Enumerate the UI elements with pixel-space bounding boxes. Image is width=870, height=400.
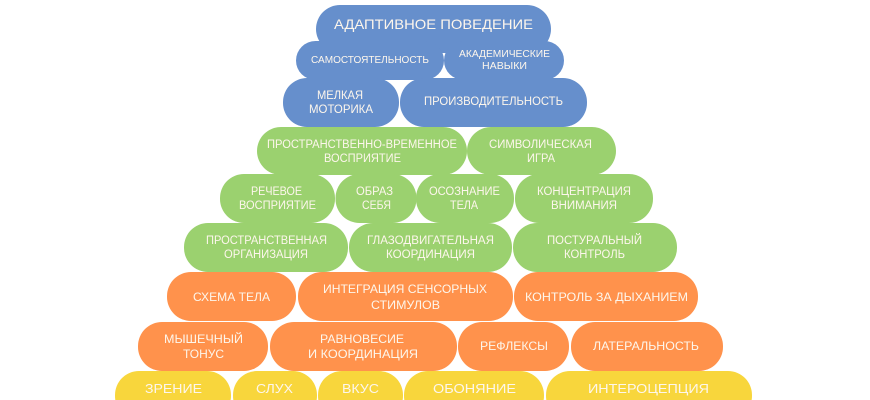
block: речевое восприятие [220, 174, 335, 223]
block: мышечный тонус: МЫШЕЧНЫЙ [164, 331, 243, 346]
block: пространственно-временное восприятие [257, 127, 467, 175]
tier: perceptual-motor skills (green) [184, 127, 677, 272]
block: равновесие и координация [270, 322, 457, 371]
block: самостоятельность [296, 41, 444, 80]
block: обоняние: ОБОНЯНИЕ [433, 381, 516, 396]
block: глазодвигательная координация [349, 223, 512, 272]
block: символическая игра: ИГРА [527, 153, 555, 165]
block: интероцепция [546, 371, 752, 400]
block: производительность: ПРОИЗВОДИТЕЛЬНОСТЬ [424, 94, 563, 108]
block: образ себя: СЕБЯ [362, 200, 391, 212]
block: рефлексы [458, 322, 569, 371]
block: интеграция сенсорных стимулов: ИНТЕГРАЦИЯ СЕНСОРНЫХ [323, 282, 487, 296]
block: равновесие и координация: И КООРДИНАЦИЯ [308, 347, 418, 361]
block: вкус: ВКУС [342, 381, 379, 396]
block: латеральность [571, 322, 723, 371]
block: интеграция сенсорных стимулов: СТИМУЛОВ [371, 298, 440, 312]
block: глазодвигательная координация: ГЛАЗОДВИГАТЕЛЬНАЯ [367, 235, 494, 247]
block: интероцепция: ИНТЕРОЦЕПЦИЯ [588, 381, 709, 396]
block: академические навыки: АКАДЕМИЧЕСКИЕ [459, 48, 550, 60]
block: производительность [400, 78, 587, 127]
block: контроль за дыханием [514, 272, 698, 321]
tier: higher functions (blue) [283, 5, 587, 127]
block: слух [233, 371, 317, 400]
block: адаптивное поведение [316, 5, 551, 53]
tier: sensory systems (yellow) [115, 371, 752, 400]
block: самостоятельность: САМОСТОЯТЕЛЬНОСТЬ [311, 54, 429, 66]
block: академические навыки [444, 41, 564, 80]
block: схема тела: СХЕМА ТЕЛА [193, 290, 270, 304]
block: пространственная организация: ПРОСТРАНСТВЕННАЯ [206, 235, 327, 247]
block: мышечный тонус [138, 322, 268, 371]
block: осознание тела [416, 174, 514, 223]
block: образ себя: ОБРАЗ [356, 186, 393, 198]
block: пространственно-временное восприятие: ВОСПРИЯТИЕ [324, 153, 401, 165]
block: зрение [115, 371, 231, 400]
block: постуральный контроль [513, 223, 677, 272]
block: схема тела [167, 272, 296, 321]
block: мелкая моторика [283, 78, 399, 127]
block: интеграция сенсорных стимулов [298, 272, 513, 321]
block: речевое восприятие: ВОСПРИЯТИЕ [239, 200, 316, 212]
block: слух: СЛУХ [256, 381, 293, 396]
block: латеральность: ЛАТЕРАЛЬНОСТЬ [593, 339, 699, 353]
block: пространственная организация: ОРГАНИЗАЦИЯ [224, 249, 308, 261]
block: мышечный тонус: ТОНУС [183, 347, 224, 361]
block: вкус [318, 371, 403, 400]
block: зрение: ЗРЕНИЕ [145, 381, 202, 396]
block: символическая игра: СИМВОЛИЧЕСКАЯ [489, 139, 592, 151]
block: академические навыки: НАВЫКИ [482, 60, 527, 72]
block: мелкая моторика: МЕЛКАЯ [317, 90, 363, 102]
block: постуральный контроль: ПОСТУРАЛЬНЫЙ [547, 234, 642, 247]
block: осознание тела: ОСОЗНАНИЕ [429, 186, 500, 198]
tier: sensorimotor foundations (orange) [138, 272, 723, 371]
block: пространственная организация [184, 223, 348, 272]
block: обоняние [404, 371, 544, 400]
block: мелкая моторика: МОТОРИКА [309, 104, 373, 116]
block: символическая игра [467, 127, 616, 175]
block: речевое восприятие: РЕЧЕВОЕ [251, 186, 302, 198]
block: образ себя [336, 174, 416, 223]
block: рефлексы: РЕФЛЕКСЫ [480, 339, 548, 353]
block: концентрация внимания: ВНИМАНИЯ [551, 200, 617, 212]
block: концентрация внимания [515, 174, 653, 223]
block: осознание тела: ТЕЛА [450, 200, 478, 212]
block: постуральный контроль: КОНТРОЛЬ [564, 249, 625, 261]
block: контроль за дыханием: КОНТРОЛЬ ЗА ДЫХАНИЕМ [525, 290, 688, 304]
block: концентрация внимания: КОНЦЕНТРАЦИЯ [537, 186, 631, 198]
block: пространственно-временное восприятие: ПРОСТРАНСТВЕННО-ВРЕМЕННОЕ [267, 139, 457, 151]
block: глазодвигательная координация: КООРДИНАЦИЯ [386, 249, 475, 261]
block: равновесие и координация: РАВНОВЕСИЕ [320, 332, 404, 346]
block: адаптивное поведение: АДАПТИВНОЕ ПОВЕДЕНИЕ [334, 16, 533, 32]
